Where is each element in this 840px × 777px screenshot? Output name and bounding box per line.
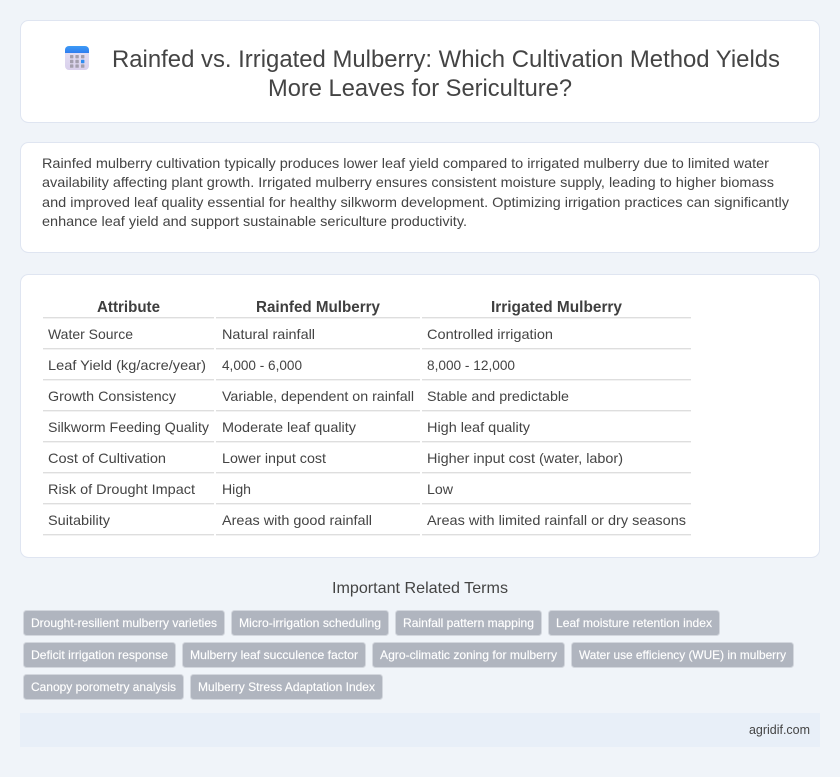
row: suitability: Areas with good rainfall xyxy=(222,512,372,528)
tag: succulence factor: Mulberry leaf succulence factor xyxy=(190,648,358,662)
row: water source: Natural rainfall xyxy=(222,326,315,342)
row: cost of cultivation: Cost of Cultivation xyxy=(48,450,166,466)
title: More Leaves for Sericulture? xyxy=(268,75,572,102)
row: silkworm feeding quality: Silkworm Feeding Quality xyxy=(48,419,209,435)
panel: introduction xyxy=(20,142,820,252)
row: water source: Controlled irrigation xyxy=(427,326,553,342)
row: suitability xyxy=(48,512,686,528)
row: water source: Water Source xyxy=(48,326,133,342)
tag: leaf moisture: Leaf moisture retention index xyxy=(556,616,712,630)
panel: related term tags xyxy=(24,610,794,700)
row: silkworm feeding quality: Moderate leaf quality xyxy=(222,419,356,435)
tag: deficit irrigation xyxy=(24,642,176,668)
tag: micro-irrigation xyxy=(232,610,388,636)
row: suitability: Suitability xyxy=(48,512,110,528)
tag: deficit irrigation: Deficit irrigation response xyxy=(31,648,168,662)
tag: agro-climatic zoning xyxy=(372,642,564,668)
tag: canopy porometry xyxy=(24,674,184,700)
panel: title card xyxy=(20,20,820,122)
text block: introduction paragraph: enhance leaf yield and support sustainable sericulture productivity. xyxy=(42,213,467,229)
row: silkworm feeding quality: High leaf quality xyxy=(427,419,530,435)
heading: important related terms: Important Related Terms xyxy=(332,580,508,597)
icon: calendar xyxy=(65,46,89,70)
row: leaf yield: 8,000 - 12,000 xyxy=(427,357,515,373)
row: water source xyxy=(48,326,553,342)
tag: drought-resilient xyxy=(24,610,224,636)
row: growth consistency: Growth Consistency xyxy=(48,388,176,404)
text block: introduction paragraph: availability affecting plant growth. Irrigated mulberry ensures consistent moisture supply, leading to higher biomass xyxy=(42,174,774,190)
table header: Irrigated Mulberry xyxy=(491,299,622,316)
row: risk of drought impact: Low xyxy=(427,481,454,497)
row: cost of cultivation xyxy=(48,450,623,466)
row: leaf yield: Leaf Yield (kg/acre/year) xyxy=(48,357,206,373)
row: cost of cultivation: Lower input cost xyxy=(222,450,326,466)
row: growth consistency: Variable, dependent on rainfall xyxy=(222,388,414,404)
text block: introduction paragraph: and improved leaf quality essential for healthy silkworm development. Optimizing irrigation practices can significantly xyxy=(42,194,789,210)
tag: succulence factor xyxy=(182,642,366,668)
tag: drought-resilient: Drought-resilient mulberry varieties xyxy=(31,616,217,630)
title xyxy=(112,46,780,102)
tag: canopy porometry: Canopy porometry analysis xyxy=(31,680,176,694)
tag: micro-irrigation: Micro-irrigation scheduling xyxy=(239,616,381,630)
row: growth consistency: Stable and predictable xyxy=(427,388,569,404)
tag: leaf moisture xyxy=(548,610,720,636)
row: growth consistency xyxy=(48,388,569,404)
table header: Rainfed Mulberry xyxy=(256,299,380,316)
table header xyxy=(97,299,622,316)
row: leaf yield: 4,000 - 6,000 xyxy=(222,357,302,373)
tag: stress adaptation: Mulberry Stress Adaptation Index xyxy=(198,680,375,694)
tag: rainfall pattern xyxy=(396,610,542,636)
row: risk of drought impact: Risk of Drought Impact xyxy=(48,481,195,497)
row: cost of cultivation: Higher input cost (water, labor) xyxy=(427,450,623,466)
row: suitability: Areas with limited rainfall or dry seasons xyxy=(427,512,686,528)
tag: water use efficiency: Water use efficiency (WUE) in mulberry xyxy=(579,648,786,662)
row: risk of drought impact xyxy=(48,481,454,497)
text block: introduction paragraph xyxy=(42,155,789,229)
tag: rainfall pattern: Rainfall pattern mapping xyxy=(403,616,534,630)
row: risk of drought impact: High xyxy=(222,481,251,497)
row: leaf yield xyxy=(48,357,515,373)
footer xyxy=(20,713,820,747)
tag: water use efficiency xyxy=(572,642,794,668)
footer: agridif.com xyxy=(749,722,810,737)
panel: comparison table xyxy=(20,274,820,558)
table header: Attribute xyxy=(97,299,160,316)
tag: stress adaptation xyxy=(190,674,382,700)
text block: introduction paragraph: Rainfed mulberry cultivation typically produces lower leaf yield compared to irrigated mulberry due to limited water xyxy=(42,155,769,171)
title: Rainfed vs. Irrigated Mulberry: Which Cultivation Method Yields xyxy=(112,46,780,73)
tag: agro-climatic zoning: Agro-climatic zoning for mulberry xyxy=(380,648,557,662)
row: silkworm feeding quality xyxy=(48,419,530,435)
